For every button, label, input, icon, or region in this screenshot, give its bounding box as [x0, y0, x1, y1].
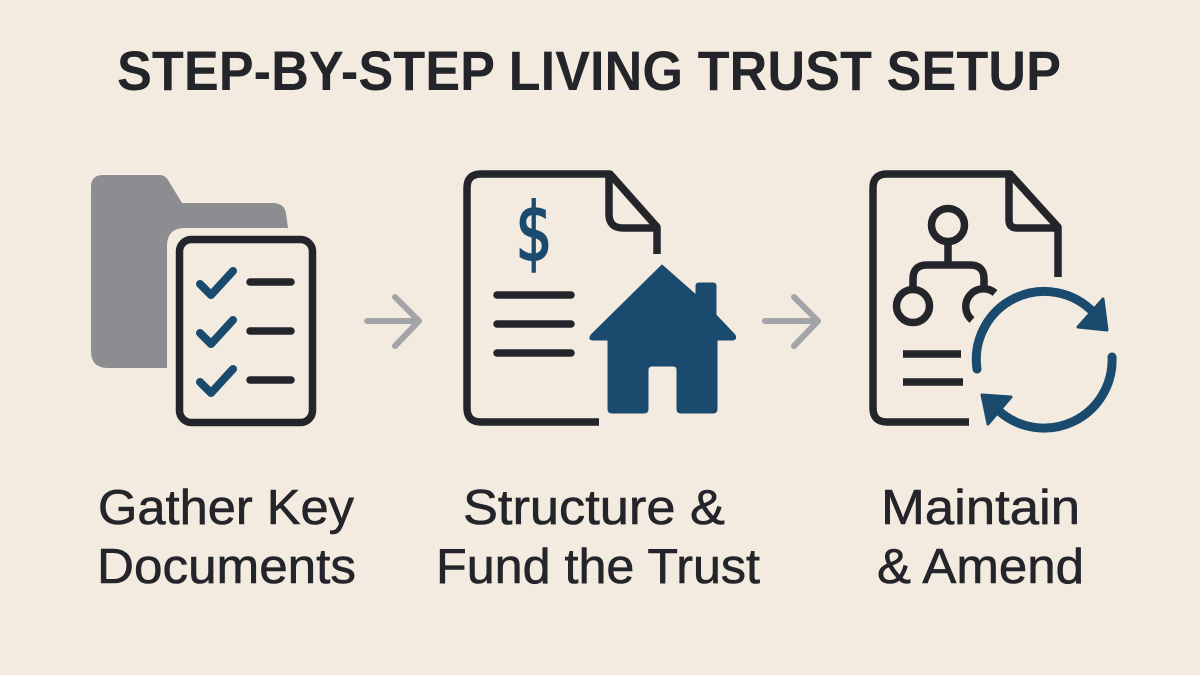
label: step 1: Documents: [97, 540, 356, 594]
dollar sign: $: [516, 186, 552, 279]
renewal cycle arrows: [976, 291, 1112, 428]
title: STEP-BY-STEP LIVING TRUST SETUP: [117, 39, 1061, 102]
icon: folder with checklist: [91, 175, 312, 422]
folder: [91, 175, 288, 368]
family tree: [896, 208, 995, 322]
house: [590, 265, 736, 413]
checklist page: [180, 240, 312, 422]
label: step 1: Gather Key: [98, 481, 355, 535]
document fold: [1009, 176, 1058, 228]
icon: document with dollar sign and house: [467, 174, 736, 422]
arrow: step 2 to step 3: [765, 297, 818, 346]
document lines: [497, 295, 571, 353]
label: step 2: [436, 481, 760, 594]
document fold: [609, 176, 657, 228]
label: step 1: [97, 481, 356, 594]
icon: document with family tree and renewal cycle: [873, 174, 1112, 428]
label: step 2: Fund the Trust: [436, 540, 760, 594]
label: step 3: [877, 481, 1084, 594]
document lines: [903, 354, 963, 382]
arrow: step 1 to step 2: [367, 297, 419, 346]
checklist lines: [250, 282, 291, 380]
document outline: [467, 174, 657, 422]
checklist marks: [200, 271, 233, 393]
label: step 3: & Amend: [877, 540, 1084, 594]
document outline: [873, 174, 1058, 422]
label: step 3: Maintain: [881, 481, 1080, 535]
label: step 2: Structure &: [463, 481, 725, 535]
